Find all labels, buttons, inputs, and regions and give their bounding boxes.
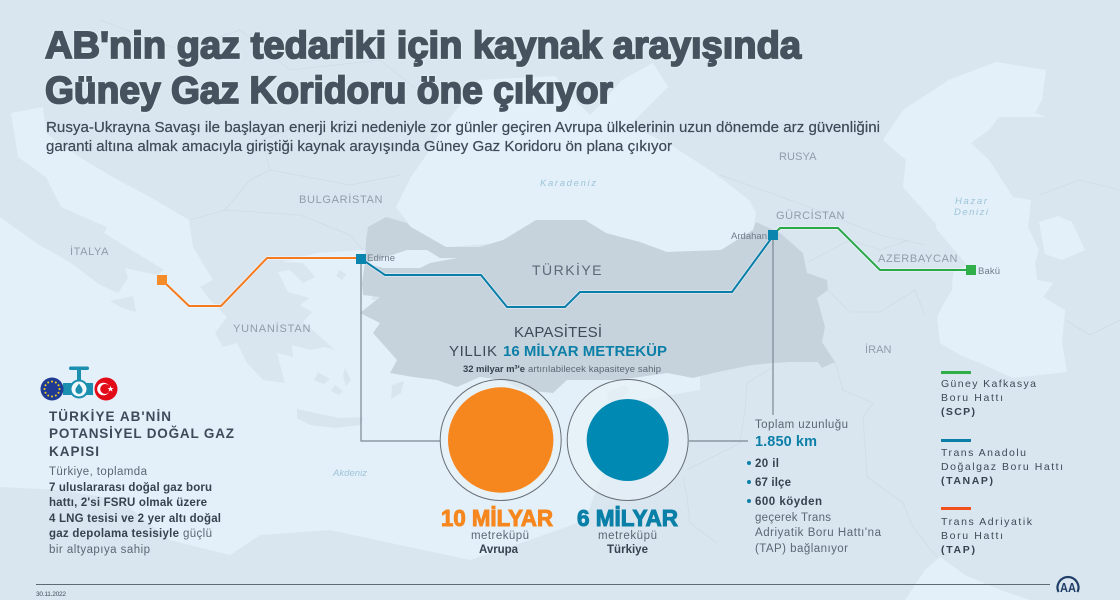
panel: pipeline length facts: Adriyatik Boru Hattı'na: [755, 527, 882, 539]
panel: pipeline length facts: 20 il: [755, 458, 779, 470]
connector lines: [361, 235, 773, 441]
country and sea labels: BULGARİSTAN: [299, 193, 384, 206]
pipeline: SCP: [768, 228, 976, 275]
country and sea labels: Denizi: [954, 207, 989, 218]
Avrupa value: 10 MİLYAR: [441, 505, 553, 531]
capacity heading: 16 MİLYAR METREKÜP: [503, 343, 667, 360]
title: [45, 25, 802, 112]
date: 30.11.2022: [36, 591, 66, 598]
capacity heading: 32 milyar m³'e: [463, 364, 525, 375]
city labels: Bakü: [978, 266, 1000, 277]
panel: pipeline length facts: [747, 419, 882, 555]
Türkiye value: metreküpü: [598, 530, 657, 542]
panel: pipeline length facts: geçerek Trans: [755, 512, 831, 524]
capacity heading: KAPASİTESİ: [514, 323, 602, 341]
legend item: SCP: Güney Kafkasya: [941, 378, 1036, 390]
circle: Türkiye share: [567, 380, 688, 500]
country and sea labels: Karadeniz: [540, 178, 596, 189]
country and sea labels: İRAN: [865, 343, 893, 356]
heading: POTANSİYEL DOĞAL GAZ: [49, 426, 234, 441]
legend item: SCP: [941, 371, 1036, 418]
body text: gaz depolama tesisiyle: [49, 528, 179, 540]
legend: [941, 371, 1063, 556]
panel: pipeline length facts: 600 köyden: [755, 496, 822, 508]
country and sea labels: [70, 151, 989, 479]
icon: EU and Turkey flags with gas valve: [40, 366, 118, 400]
panel: pipeline length facts: 67 ilçe: [755, 477, 791, 489]
capacity heading: YILLIK: [449, 343, 497, 360]
Avrupa value: [441, 505, 553, 556]
country and sea labels: GÜRCİSTAN: [776, 209, 846, 222]
body text: 4 LNG tesisi ve 2 yer altı doğal: [49, 513, 221, 525]
country and sea labels: İTALYA: [70, 245, 110, 258]
legend item: TAP: (TAP): [941, 544, 975, 556]
body text: 7 uluslararası doğal gaz boru: [49, 482, 212, 494]
intro paragraph: Rusya-Ukrayna Savaşı ile başlayan enerji krizi nedeniyle zor günler geçiren Avrupa ülkelerinin uzun dönemde arz güvenliğini: [46, 120, 880, 136]
legend item: TAP: [941, 507, 1033, 556]
country and sea labels: Hazar: [955, 196, 988, 207]
country and sea labels: YUNANİSTAN: [233, 322, 312, 335]
legend item: TANAP: [941, 439, 1063, 487]
legend item: TANAP: Trans Anadolu: [941, 447, 1026, 459]
body text: Türkiye, toplamda: [49, 466, 148, 478]
body text: bir altyapıya sahip: [49, 544, 150, 556]
country and sea labels: AZERBAYCAN: [878, 253, 959, 265]
panel: pipeline length facts: 1.850 km: [755, 434, 817, 450]
Türkiye value: Türkiye: [607, 544, 648, 556]
country and sea labels: RUSYA: [779, 151, 818, 163]
legend item: TAP: Trans Adriyatik: [941, 516, 1033, 528]
Türkiye value: [577, 505, 678, 556]
heading: [49, 409, 234, 459]
pipeline: TANAP: [356, 236, 773, 307]
city labels: Ardahan: [731, 231, 767, 242]
legend item: TAP: Boru Hattı: [941, 530, 1003, 542]
country and sea labels: TÜRKİYE: [532, 261, 604, 278]
body text: hattı, 2'si FSRU olmak üzere: [49, 497, 207, 509]
Avrupa value: metreküpü: [471, 530, 529, 542]
Avrupa value: Avrupa: [479, 544, 519, 556]
capacity heading: artırılabilecek kapasiteye sahip: [528, 364, 661, 375]
body text: [49, 466, 221, 556]
pipeline: TAP: [157, 258, 357, 306]
legend item: SCP: (SCP): [941, 406, 975, 418]
title: Güney Gaz Koridoru öne çıkıyor: [45, 70, 613, 112]
intro paragraph: [46, 120, 880, 155]
country and sea labels: Akdeniz: [332, 468, 367, 479]
legend item: SCP: Boru Hattı: [941, 392, 1003, 404]
legend item: TANAP: (TANAP): [941, 475, 993, 487]
legend item: TANAP: Doğalgaz Boru Hattı: [941, 461, 1063, 473]
city labels: Edirne: [367, 253, 395, 264]
Türkiye value: 6 MİLYAR: [577, 505, 678, 531]
body text: güçlü: [183, 528, 212, 540]
heading: KAPISI: [49, 444, 99, 459]
heading: TÜRKİYE AB'NİN: [49, 409, 171, 424]
capacity heading: [449, 323, 667, 375]
panel: Türkiye gas gateway text: [49, 409, 234, 556]
panel: pipeline length facts: Toplam uzunluğu: [755, 419, 848, 431]
icon: AA logo: AA: [1060, 580, 1077, 595]
circle: Avrupa share: [440, 380, 561, 500]
title: AB'nin gaz tedariki için kaynak arayışında: [45, 25, 802, 67]
panel: pipeline length facts: (TAP) bağlanıyor: [755, 543, 848, 555]
footer rule: [36, 584, 1050, 586]
city labels: [367, 231, 1000, 277]
intro paragraph: garanti altına almak amacıyla giriştiği kaynak arayışında Güney Gaz Koridoru ön plana çıkıyor: [46, 139, 672, 155]
